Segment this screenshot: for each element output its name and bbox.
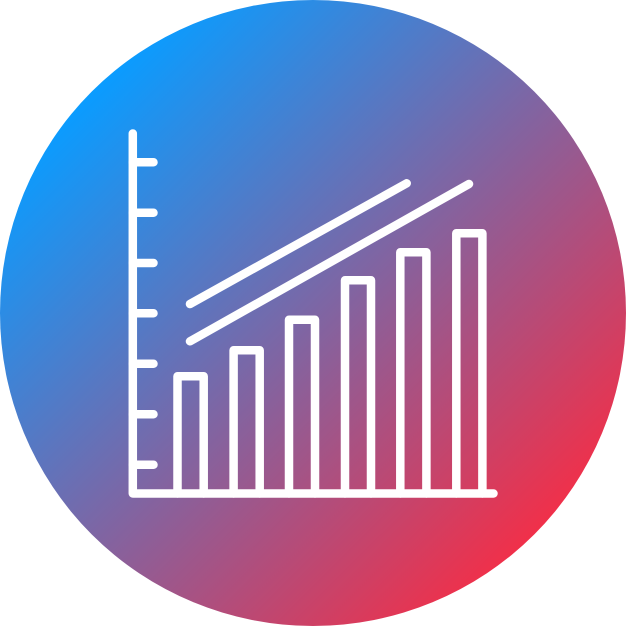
bars: [178, 233, 482, 494]
axis ticks: [133, 162, 154, 465]
chart line art: [133, 134, 494, 494]
trend lines: [190, 183, 469, 341]
axes: [133, 134, 494, 494]
